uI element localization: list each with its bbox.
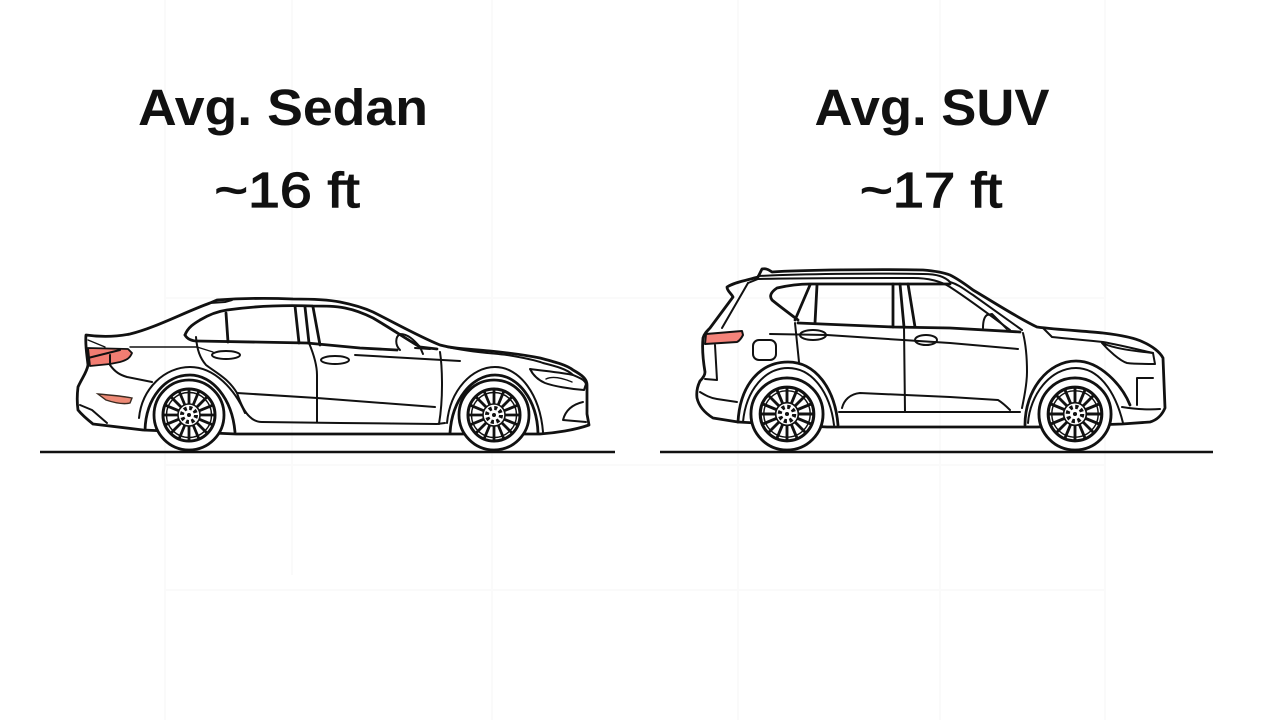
SUV hatch line bbox=[722, 283, 748, 328]
sedan body outline bbox=[77, 298, 589, 434]
SUV hood line bbox=[1043, 328, 1153, 353]
sedan tail light bbox=[88, 348, 132, 366]
sedan grille bbox=[563, 402, 586, 422]
ground line: sedan bbox=[40, 451, 615, 453]
SUV doors bbox=[795, 323, 799, 362]
heading: sedan length: ~16 ft bbox=[214, 164, 360, 218]
SUV illustration bbox=[697, 269, 1165, 450]
SUV wheel arches bbox=[738, 362, 838, 425]
heading: sedan label: Avg. Sedan bbox=[138, 79, 428, 136]
heading: SUV label: Avg. SUV bbox=[814, 79, 1050, 136]
SUV front wheel bbox=[1039, 378, 1111, 450]
sedan front wheel bbox=[459, 380, 529, 450]
SUV fuel door bbox=[753, 340, 776, 360]
sedan roof detail bbox=[210, 300, 232, 303]
SUV mirror bbox=[983, 314, 1007, 329]
SUV windows bbox=[771, 284, 950, 320]
sedan rear wheel bbox=[154, 380, 224, 450]
SUV headlamp bbox=[1102, 343, 1155, 364]
heading: SUV length: ~17 ft bbox=[860, 164, 1002, 218]
SUV rear wheel bbox=[751, 378, 823, 450]
SUV front bumper bbox=[1122, 378, 1160, 409]
sedan rear vent bbox=[80, 405, 107, 423]
SUV body outline bbox=[697, 269, 1165, 427]
sedan headlamp bbox=[530, 369, 586, 390]
sedan greenhouse bbox=[185, 306, 437, 349]
sedan mirror bbox=[396, 334, 430, 354]
SUV roof rail bbox=[748, 278, 1010, 330]
SUV tail light bbox=[705, 331, 743, 344]
sedan hood line bbox=[447, 347, 573, 375]
ground line: SUV bbox=[660, 451, 1213, 453]
SUV door handles bbox=[800, 330, 826, 340]
sedan side marker bbox=[98, 394, 132, 404]
sedan wheel arches bbox=[139, 367, 245, 418]
sedan doors bbox=[196, 337, 445, 424]
sedan door handles bbox=[212, 351, 240, 359]
background grid bbox=[165, 0, 1105, 720]
sedan illustration bbox=[77, 298, 589, 450]
